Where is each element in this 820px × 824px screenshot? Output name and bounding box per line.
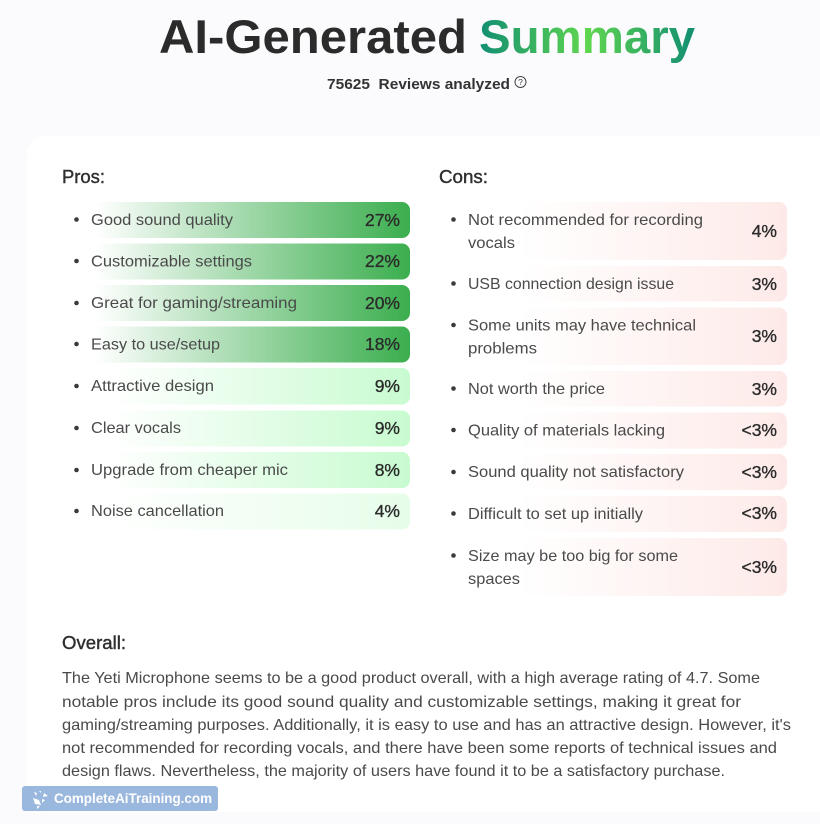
row: attractive design — [74, 368, 410, 404]
row: good sound quality — [74, 202, 410, 238]
row: customizable settings: Customizable settings — [91, 254, 252, 270]
row: attractive design: Attractive design — [91, 378, 214, 395]
row: not worth the price: 3% — [752, 379, 777, 399]
row: upgrade from cheaper mic: Upgrade from cheaper mic — [91, 462, 288, 479]
heading: overall: Overall: — [62, 633, 126, 653]
row: good sound quality: 27% — [365, 210, 400, 230]
row: usb connection design issue: USB connection design issue — [468, 276, 674, 293]
watermark badge — [22, 786, 218, 811]
row: some units may have technical problems: 3% — [752, 326, 777, 346]
icon: help: ? — [518, 77, 523, 87]
row: easy to use/setup: 18% — [365, 334, 400, 354]
subtitle: reviews analyzed: 75625 Reviews analyzed — [327, 76, 510, 93]
row: good sound quality: Good sound quality — [91, 212, 233, 229]
watermark text: CompleteAiTraining.com — [54, 790, 212, 806]
overall text: gaming/streaming purposes. Additionally, it is easy to use and has an attractive design. However, it's — [62, 717, 791, 734]
row: some units may have technical problems — [451, 308, 787, 365]
row: difficult to set up initially — [451, 496, 787, 532]
overall text: The Yeti Microphone seems to be a good product overall, with a high average rating of 4.7. Some — [62, 670, 760, 687]
row: quality of materials lacking: <3% — [741, 420, 777, 440]
summary card — [27, 136, 820, 812]
panel: pros — [62, 167, 410, 530]
row: clear vocals: 9% — [375, 418, 400, 438]
row: not recommended for recording vocals: 4% — [752, 221, 777, 241]
row: not recommended for recording vocals: Not recommended for recording — [468, 212, 703, 229]
overall text: not recommended for recording vocals, and there have been some reports of technical issues and — [62, 740, 777, 757]
icon: sparkle — [33, 791, 48, 809]
row: noise cancellation: Noise cancellation — [91, 503, 224, 520]
row: great for gaming/streaming — [74, 285, 410, 321]
title: AI-Generated — [159, 10, 467, 63]
row: sound quality not satisfactory: <3% — [741, 462, 777, 482]
row: great for gaming/streaming: 20% — [365, 293, 400, 313]
row: size may be too big for some spaces: spaces — [468, 571, 520, 588]
panel: cons — [439, 167, 787, 596]
row: sound quality not satisfactory: Sound quality not satisfactory — [468, 464, 684, 481]
row: clear vocals — [74, 410, 410, 446]
row: usb connection design issue — [451, 266, 787, 302]
row: usb connection design issue: 3% — [752, 274, 777, 294]
row: great for gaming/streaming: Great for gaming/streaming — [91, 295, 297, 312]
heading: cons: Cons: — [439, 167, 488, 187]
row: some units may have technical problems: problems — [468, 340, 537, 358]
row: quality of materials lacking: Quality of materials lacking — [468, 422, 665, 440]
overall text — [62, 670, 791, 780]
row: difficult to set up initially: Difficult to set up initially — [468, 506, 643, 523]
panel: overall — [62, 633, 791, 780]
row: quality of materials lacking — [451, 412, 787, 448]
row: easy to use/setup: Easy to use/setup — [91, 336, 220, 354]
row: upgrade from cheaper mic: 8% — [375, 460, 400, 480]
row: noise cancellation — [74, 494, 410, 530]
row: not recommended for recording vocals — [451, 202, 787, 260]
row: size may be too big for some spaces: <3% — [741, 557, 777, 577]
heading: pros: Pros: — [62, 167, 105, 187]
row: customizable settings — [74, 244, 410, 280]
title: Summary — [479, 10, 695, 63]
row: upgrade from cheaper mic — [74, 452, 410, 488]
row: customizable settings: 22% — [365, 251, 400, 271]
row: size may be too big for some spaces — [451, 538, 787, 596]
title — [159, 10, 695, 63]
row: not worth the price — [451, 371, 787, 406]
row: size may be too big for some spaces: Size may be too big for some — [468, 548, 678, 565]
row: easy to use/setup — [74, 326, 410, 362]
icon: help — [515, 76, 526, 88]
overall text: design flaws. Nevertheless, the majority of users have found it to be a satisfactory purchase. — [62, 763, 725, 780]
row: clear vocals: Clear vocals — [91, 420, 181, 437]
row: not recommended for recording vocals: vocals — [468, 235, 515, 252]
row: sound quality not satisfactory — [451, 454, 787, 490]
row: not worth the price: Not worth the price — [468, 381, 605, 398]
row: attractive design: 9% — [375, 376, 400, 396]
row: difficult to set up initially: <3% — [741, 503, 777, 523]
overall text: notable pros include its good sound quality and customizable settings, making it great for — [62, 694, 742, 711]
row: noise cancellation: 4% — [375, 501, 400, 521]
row: some units may have technical problems: Some units may have technical — [468, 318, 696, 334]
